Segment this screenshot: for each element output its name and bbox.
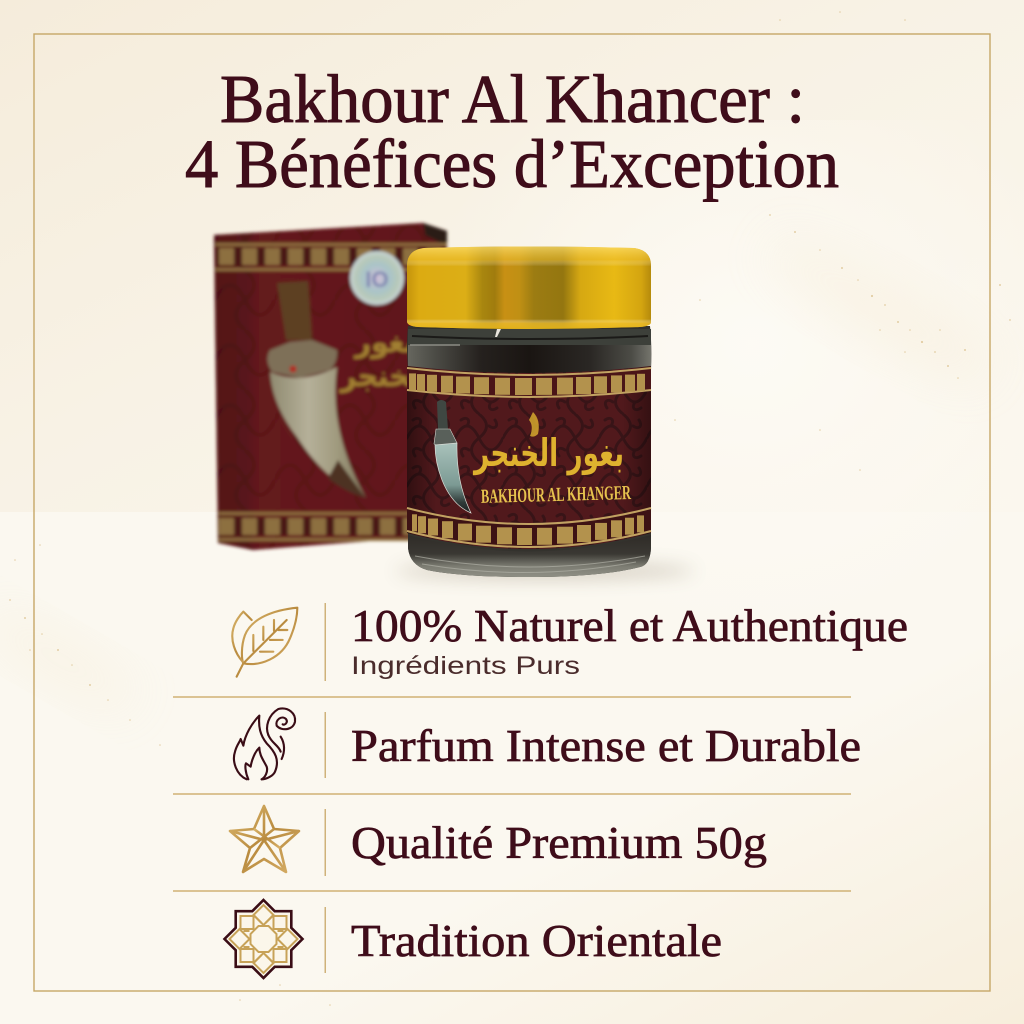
benefit rows xyxy=(173,600,908,978)
heading: 100% Naturel et Authentique xyxy=(351,600,908,651)
product box: IO xyxy=(365,267,389,292)
vertical divider xyxy=(324,907,326,973)
icon: flame with smoke xyxy=(234,709,295,779)
row dividers xyxy=(173,696,851,892)
icon: leaf xyxy=(232,608,297,677)
title: 4 Bénéfices d’Exception xyxy=(185,126,839,202)
jar glass xyxy=(407,326,651,577)
heading: Qualité Premium 50g xyxy=(351,817,767,868)
product box: الخنجر xyxy=(338,360,430,393)
title: Bakhour Al Khancer : xyxy=(220,61,805,137)
vertical divider xyxy=(324,809,326,876)
jar shadow xyxy=(395,563,695,579)
benefit 3: premium xyxy=(230,806,767,876)
benefit 4: tradition xyxy=(224,900,722,978)
heading: Parfum Intense et Durable xyxy=(351,720,861,771)
label name: BAKHOUR AL KHANGER xyxy=(481,482,632,508)
heading: Tradition Orientale xyxy=(351,915,722,966)
jar label xyxy=(407,366,651,549)
benefit 2: perfume xyxy=(234,709,861,779)
benefit 1: natural xyxy=(232,600,908,681)
product box: بغور xyxy=(353,326,415,359)
title xyxy=(185,61,839,202)
dagger on label xyxy=(434,400,471,513)
vertical divider xyxy=(324,712,326,778)
Arabic gold text xyxy=(473,412,624,475)
jar xyxy=(407,246,651,577)
vertical divider xyxy=(324,603,326,681)
Arabic gold text: بغور الخنجر xyxy=(473,431,624,475)
icon: oriental geometric star xyxy=(224,900,302,978)
jar lid xyxy=(407,246,651,337)
icon: star xyxy=(230,806,299,872)
subheading: Ingrédients Purs xyxy=(351,652,580,680)
product photo xyxy=(214,223,695,579)
product box xyxy=(214,223,447,550)
